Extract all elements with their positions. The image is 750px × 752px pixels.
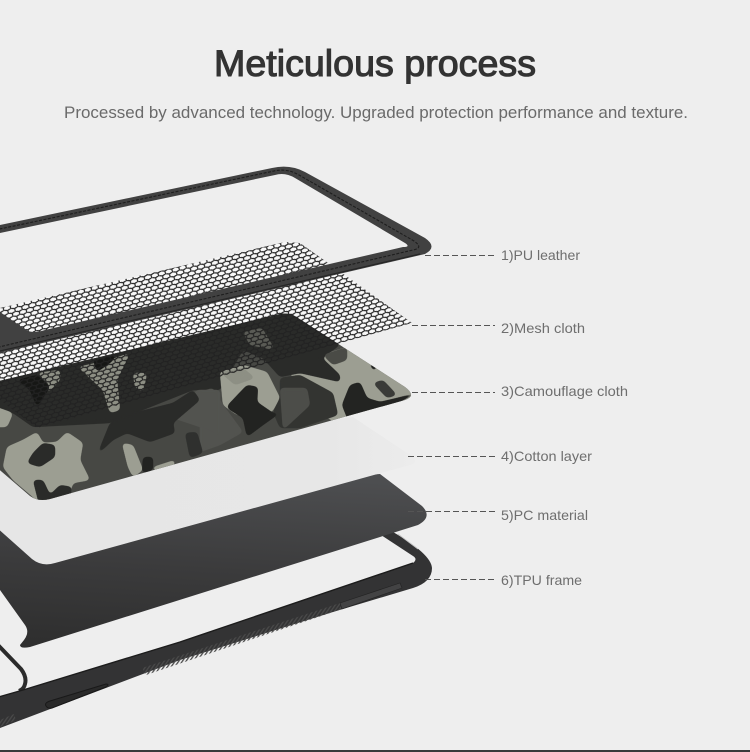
bottom edge line xyxy=(0,750,750,752)
leader line 4 xyxy=(408,456,495,458)
label 3: 3)Camouflage cloth xyxy=(501,383,628,399)
title: Meticulous process xyxy=(214,43,536,84)
layer: PC material xyxy=(0,474,427,648)
leader line 2 xyxy=(412,324,495,326)
label 4: 4)Cotton layer xyxy=(501,448,592,464)
label 1: 1)PU leather xyxy=(501,247,580,263)
layer: camouflage cloth xyxy=(0,314,411,500)
label 6: 6)TPU frame xyxy=(501,572,582,588)
leader line 6 xyxy=(425,578,495,580)
layer: mesh cloth xyxy=(0,235,420,435)
leader line 5 xyxy=(408,510,495,512)
label 2: 2)Mesh cloth xyxy=(501,320,585,336)
leader line 3 xyxy=(412,392,495,394)
subtitle: Processed by advanced technology. Upgraded protection performance and texture. xyxy=(64,103,688,122)
layer: TPU frame xyxy=(0,532,432,730)
layer: PU leather frame xyxy=(0,167,432,354)
leader line 1 xyxy=(425,254,495,256)
layer: mesh cloth backing xyxy=(0,242,412,428)
label 5: 5)PC material xyxy=(501,507,588,523)
layer: cotton layer xyxy=(0,417,415,564)
